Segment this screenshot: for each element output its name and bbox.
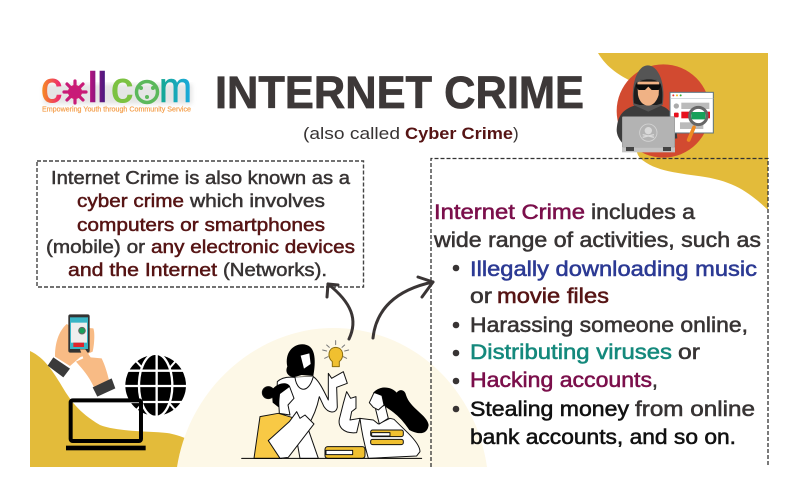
definition text: any electronic devices xyxy=(151,236,355,257)
activities text: Hacking accounts xyxy=(470,369,652,392)
illustration: three women with light bulb xyxy=(242,341,429,458)
logo: collcom: c xyxy=(41,64,62,112)
definition text: (Networks). xyxy=(223,259,327,280)
icon: browser login window xyxy=(670,92,713,133)
activities text: includes a xyxy=(591,201,695,224)
subtitle: ) xyxy=(513,124,519,143)
activities text: Stealing money xyxy=(470,398,630,421)
light bulb xyxy=(323,341,349,367)
icon: globe xyxy=(124,353,187,417)
activities text: , xyxy=(652,369,658,392)
title: INTERNET CRIME xyxy=(215,67,584,118)
bullets xyxy=(453,265,459,412)
arrow: to definition box xyxy=(327,284,353,339)
activities text: Distributing viruses xyxy=(470,341,672,364)
seated woman in yellow xyxy=(254,383,314,458)
logo: collcom: m xyxy=(159,64,192,112)
definition text: and the Internet xyxy=(68,259,217,280)
icon: hacker at laptop xyxy=(617,64,713,158)
activities text: movie files xyxy=(497,285,609,308)
background: yellow wave bottom left xyxy=(30,351,190,467)
activities text: Harassing someone online, xyxy=(470,314,748,337)
definition text: cyber crime xyxy=(77,190,184,211)
activities text: Internet Crime xyxy=(434,201,585,224)
definition text: which involves xyxy=(189,190,325,211)
seated woman with books xyxy=(339,388,429,458)
background: yellow wave top right xyxy=(598,53,768,210)
activities text: or xyxy=(678,341,700,364)
icon: magnifying glass xyxy=(689,107,707,140)
logo: collcom: Empowering Youth through Community Service xyxy=(42,106,191,114)
subtitle: (also called xyxy=(303,124,400,143)
activities text: from online xyxy=(635,398,755,421)
icon: phone in hand xyxy=(48,314,115,397)
panel: activities box xyxy=(431,158,768,467)
activities text xyxy=(433,201,761,449)
panel: definition box xyxy=(37,161,364,287)
standing woman xyxy=(277,344,347,458)
icon: laptop xyxy=(66,400,146,450)
definition text: (mobile) or xyxy=(46,236,145,257)
logo: collcom: c xyxy=(111,64,133,112)
activities text: Illegally downloading music xyxy=(470,258,757,281)
definition text: Internet Crime is also known as a xyxy=(51,167,351,188)
logo: collcom: ll xyxy=(88,64,107,112)
activities text: bank accounts, and so on. xyxy=(470,426,736,449)
subtitle xyxy=(303,124,519,143)
activities text: wide range of activities, such as xyxy=(433,229,761,252)
activities text: or xyxy=(470,285,492,308)
book on table xyxy=(325,447,365,458)
definition text: computers or smartphones xyxy=(77,214,325,235)
arrow: to activities box xyxy=(373,277,433,338)
icon: hacker laptop xyxy=(622,117,675,152)
logo: collcom xyxy=(41,64,192,114)
definition text xyxy=(46,167,355,280)
subtitle: Cyber Crime xyxy=(405,124,513,143)
background: cream semicircle xyxy=(177,328,487,467)
